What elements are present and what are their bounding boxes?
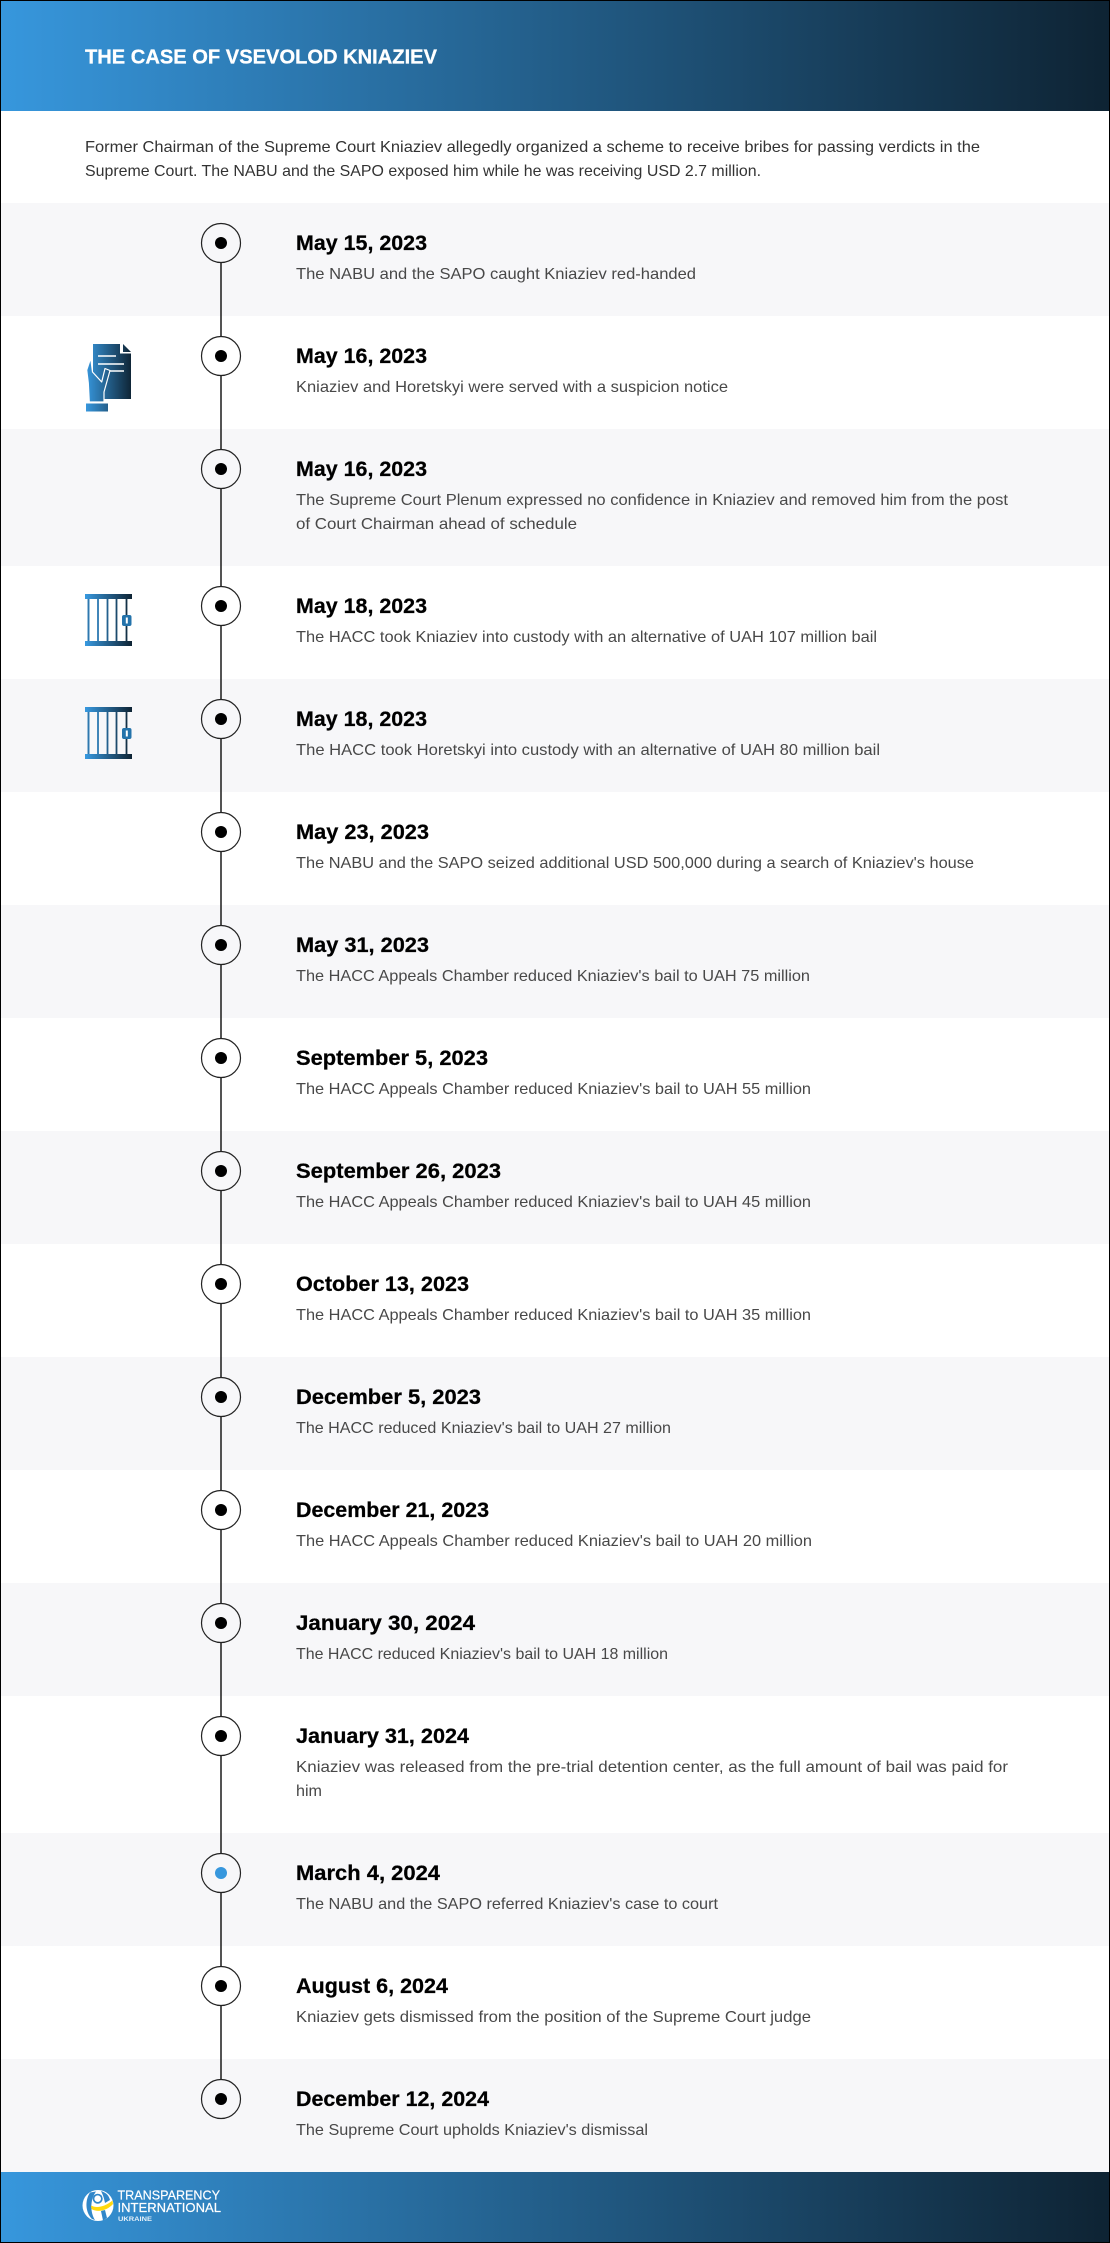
description: The HACC Appeals Chamber reduced Kniaziev's bail to UAH 35 million: [296, 1307, 811, 1324]
description: The NABU and the SAPO referred Kniaziev's case to court: [296, 1896, 719, 1913]
date: May 16, 2023: [296, 345, 427, 368]
marker: [202, 224, 240, 262]
description: Kniaziev gets dismissed from the position of the Supreme Court judge: [296, 2009, 811, 2026]
timeline entry: December 12, 2024: [0, 2059, 1110, 2172]
description: The HACC reduced Kniaziev's bail to UAH 27 million: [296, 1420, 671, 1437]
date: May 16, 2023: [296, 458, 427, 481]
marker: [202, 1604, 240, 1642]
date: May 23, 2023: [296, 821, 429, 844]
logo: Transparency International Ukraine: [82, 2188, 221, 2223]
timeline entry: August 6, 2024: [0, 1946, 1110, 2059]
marker: [202, 1966, 240, 2006]
icon: prison bars: [85, 707, 132, 759]
logo wordmark: [118, 2188, 221, 2223]
description: The Supreme Court upholds Kniaziev's dismissal: [296, 2122, 648, 2139]
description: [296, 492, 1009, 533]
timeline entry: October 13, 2023: [0, 1244, 1110, 1357]
marker: highlighted: [202, 1854, 240, 1892]
marker: [202, 700, 240, 738]
marker: [202, 2080, 240, 2118]
date: May 18, 2023: [296, 595, 427, 618]
description: of Court Chairman ahead of schedule: [296, 516, 577, 533]
timeline entry: May 16, 2023 plenum: [0, 429, 1110, 566]
description: Kniaziev was released from the pre-trial detention center, as the full amount of bail was paid for: [296, 1759, 1009, 1776]
intro text: Former Chairman of the Supreme Court Kniaziev allegedly organized a scheme to receive bribes for passing verdicts in the: [85, 139, 980, 156]
date: September 26, 2023: [296, 1160, 501, 1183]
date: May 15, 2023: [296, 232, 427, 255]
date: December 12, 2024: [296, 2088, 489, 2111]
description: The Supreme Court Plenum expressed no confidence in Kniaziev and removed him from the post: [296, 492, 1009, 509]
timeline entry: January 30, 2024: [0, 1583, 1110, 1696]
description: The NABU and the SAPO caught Kniaziev red-handed: [296, 266, 696, 283]
icon: hand holding document: [86, 344, 131, 412]
date: August 6, 2024: [296, 1975, 448, 1998]
description: Kniaziev and Horetskyi were served with a suspicion notice: [296, 379, 728, 396]
date: October 13, 2023: [296, 1273, 469, 1296]
description: The HACC Appeals Chamber reduced Kniaziev's bail to UAH 20 million: [296, 1533, 812, 1550]
description: The HACC Appeals Chamber reduced Kniaziev's bail to UAH 45 million: [296, 1194, 811, 1211]
description: him: [296, 1783, 322, 1800]
marker: [202, 1378, 240, 1416]
description: The HACC reduced Kniaziev's bail to UAH 18 million: [296, 1646, 668, 1663]
date: May 31, 2023: [296, 934, 429, 957]
marker: [202, 812, 240, 852]
description: The NABU and the SAPO seized additional USD 500,000 during a search of Kniaziev's house: [296, 855, 974, 872]
intro text: [85, 139, 980, 180]
date: May 18, 2023: [296, 708, 427, 731]
timeline entry: December 21, 2023: [0, 1470, 1110, 1583]
marker: [202, 1038, 240, 1078]
date: December 5, 2023: [296, 1386, 481, 1409]
marker: [202, 336, 240, 376]
description: The HACC Appeals Chamber reduced Kniaziev's bail to UAH 55 million: [296, 1081, 811, 1098]
description: The HACC Appeals Chamber reduced Kniaziev's bail to UAH 75 million: [296, 968, 810, 985]
timeline entry: May 31, 2023: [0, 905, 1110, 1018]
title: THE CASE OF VSEVOLOD KNIAZIEV: [85, 46, 438, 68]
timeline entry: January 31, 2024: [0, 1696, 1110, 1833]
logo wordmark: INTERNATIONAL: [118, 2200, 221, 2215]
timeline entry: September 26, 2023: [0, 1131, 1110, 1244]
timeline entry: September 5, 2023: [0, 1018, 1110, 1131]
date: January 31, 2024: [296, 1725, 469, 1748]
logo emblem: [82, 2190, 114, 2221]
marker: [202, 926, 240, 964]
timeline entry: March 4, 2024: [0, 1833, 1110, 1946]
header banner: [0, 0, 1110, 111]
logo wordmark: UKRAINE: [118, 2216, 153, 2223]
timeline entry: May 18, 2023 Kniaziev custody: [0, 566, 1110, 679]
intro text: Supreme Court. The NABU and the SAPO exposed him while he was receiving USD 2.7 million.: [85, 163, 761, 180]
marker: [202, 450, 240, 488]
icon: prison bars: [85, 594, 132, 646]
timeline entry: May 23, 2023: [0, 792, 1110, 905]
marker: [202, 586, 240, 626]
timeline entry: May 15, 2023: [0, 203, 1110, 316]
footer banner: [0, 2172, 1110, 2243]
marker: [202, 1716, 240, 1756]
marker: [202, 1264, 240, 1304]
marker: [202, 1490, 240, 1530]
marker: [202, 1152, 240, 1190]
date: March 4, 2024: [296, 1862, 440, 1885]
date: December 21, 2023: [296, 1499, 489, 1522]
description: [296, 1759, 1009, 1800]
date: January 30, 2024: [296, 1612, 475, 1635]
description: The HACC took Kniaziev into custody with an alternative of UAH 107 million bail: [296, 629, 877, 646]
timeline entry: May 16, 2023 suspicion: [0, 316, 1110, 429]
logo wordmark: TRANSPARENCY: [118, 2188, 220, 2202]
timeline entry: May 18, 2023 Horetskyi custody: [0, 679, 1110, 792]
timeline entry: December 5, 2023: [0, 1357, 1110, 1470]
date: September 5, 2023: [296, 1047, 488, 1070]
description: The HACC took Horetskyi into custody with an alternative of UAH 80 million bail: [296, 742, 880, 759]
